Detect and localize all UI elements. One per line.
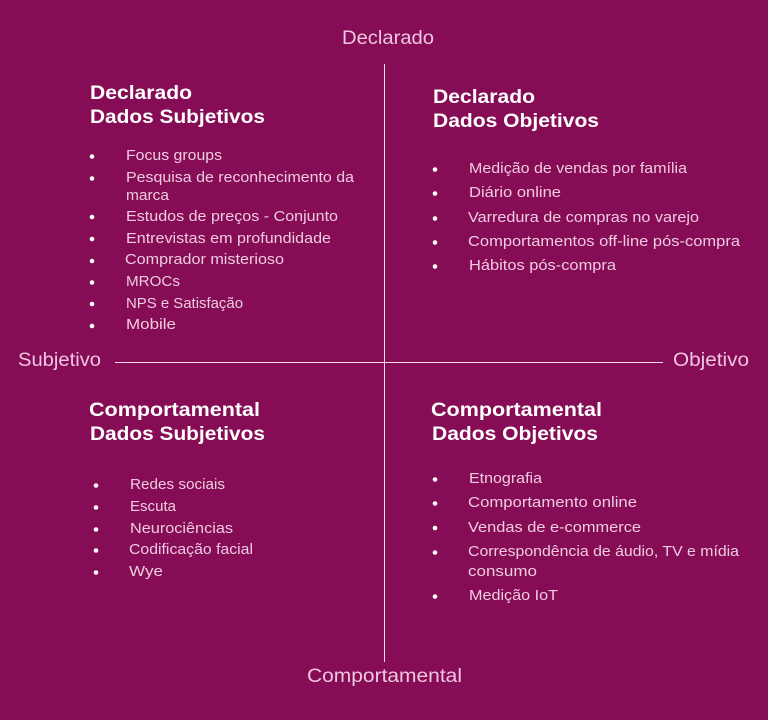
list: comportamental, dados subjetivos	[94, 476, 253, 580]
heading: declarado, dados subjetivos: Dados Subjetivos	[90, 107, 265, 128]
list: declarado, dados objetivos: Diário online	[469, 184, 561, 201]
list: declarado, dados subjetivos: Pesquisa de reconhecimento da	[126, 169, 355, 186]
heading: comportamental, dados subjetivos: Dados Subjetivos	[90, 424, 265, 445]
list: declarado, dados subjetivos: NPS e Satisfação	[126, 295, 243, 312]
heading: declarado, dados objetivos	[433, 87, 599, 132]
list: declarado, dados objetivos: Medição de vendas por família	[469, 160, 688, 177]
heading: declarado, dados subjetivos	[90, 83, 265, 128]
list: declarado, dados subjetivos: Focus groups	[126, 147, 222, 164]
heading: declarado, dados objetivos: Dados Objetivos	[433, 111, 599, 132]
list: comportamental, dados objetivos: Vendas de e-commerce	[468, 519, 641, 536]
list: comportamental, dados objetivos: Etnografia	[469, 470, 543, 487]
list: declarado, dados objetivos: Varredura de compras no varejo	[468, 209, 699, 226]
list: comportamental, dados subjetivos: Neurociências	[130, 520, 233, 537]
heading: comportamental, dados subjetivos	[89, 400, 265, 445]
list: comportamental, dados subjetivos: Redes sociais	[130, 476, 225, 493]
list: declarado, dados subjetivos: MROCs	[126, 273, 180, 290]
panel: declarado, dados subjetivos	[90, 83, 355, 333]
list: declarado, dados objetivos: Hábitos pós-compra	[469, 257, 617, 274]
list: declarado, dados subjetivos: Estudos de preços - Conjunto	[126, 208, 338, 225]
axis label: Comportamental: Comportamental	[307, 665, 462, 687]
list: comportamental, dados objetivos: consumo	[468, 563, 537, 580]
list: comportamental, dados subjetivos: Wye	[129, 563, 163, 580]
list: declarado, dados subjetivos	[90, 147, 355, 333]
axis label: Objetivo: Objetivo	[673, 349, 749, 371]
panel: declarado, dados objetivos	[433, 87, 741, 274]
panel: comportamental, dados subjetivos	[89, 400, 265, 580]
list: declarado, dados subjetivos: marca	[126, 187, 170, 204]
heading: declarado, dados objetivos: Declarado	[433, 87, 535, 108]
list: comportamental, dados objetivos: Correspondência de áudio, TV e mídia	[468, 543, 740, 560]
list: comportamental, dados objetivos	[433, 470, 740, 604]
heading: declarado, dados subjetivos: Declarado	[90, 83, 192, 104]
heading: comportamental, dados objetivos: Dados Objetivos	[432, 424, 598, 445]
heading: comportamental, dados objetivos	[431, 400, 602, 445]
list: declarado, dados subjetivos: Comprador misterioso	[125, 251, 284, 268]
axis label: Declarado: Declarado	[342, 27, 434, 49]
list: comportamental, dados subjetivos: Escuta	[130, 498, 177, 515]
list: declarado, dados subjetivos: Entrevistas em profundidade	[126, 230, 331, 247]
panel: comportamental, dados objetivos	[431, 400, 740, 604]
list: declarado, dados objetivos: Comportamentos off-line pós-compra	[468, 233, 741, 250]
list: declarado, dados subjetivos: Mobile	[126, 316, 176, 333]
heading: comportamental, dados subjetivos: Comportamental	[89, 400, 260, 421]
list: comportamental, dados objetivos: Medição IoT	[469, 587, 558, 604]
axis label: Subjetivo: Subjetivo	[18, 349, 101, 371]
list: comportamental, dados objetivos: Comportamento online	[468, 494, 637, 511]
heading: comportamental, dados objetivos: Comportamental	[431, 400, 602, 421]
list: comportamental, dados subjetivos: Codificação facial	[129, 541, 253, 558]
list: declarado, dados objetivos	[433, 160, 741, 274]
